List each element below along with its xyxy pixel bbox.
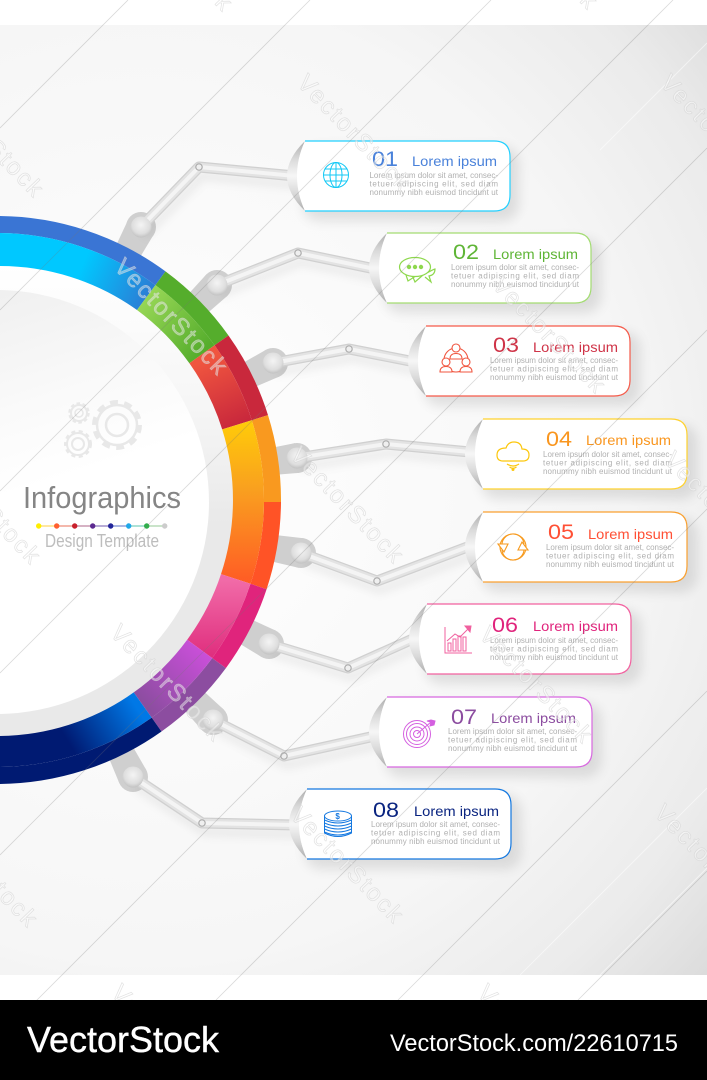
icon: coin stack (324, 811, 352, 836)
pivot spheres (122, 216, 312, 788)
watermark: VectorStock (105, 619, 229, 747)
card 08 (289, 789, 521, 869)
body 02: nonummy nibh euismod tincidunt ut (451, 280, 580, 289)
central disc (0, 290, 209, 714)
icon: bar chart (445, 626, 472, 653)
icon: team circle (440, 344, 472, 372)
body 06: tetuer adipiscing elit, sed diam (490, 644, 618, 654)
subtitle: Design Template (45, 531, 159, 551)
card 04 (465, 419, 697, 499)
body 07 (448, 727, 578, 753)
icon: target (404, 720, 435, 748)
body 08 (371, 820, 501, 846)
card 06 (409, 604, 641, 684)
body 07: Lorem ipsum dolor sit amet, consec- (448, 727, 577, 736)
segment 07 purple (134, 640, 226, 732)
body 07: tetuer adipiscing elit, sed diam (448, 736, 577, 744)
card 07 (369, 697, 601, 777)
body 05 (546, 543, 675, 569)
segments 04 and 05 orange (221, 415, 281, 589)
body 02: tetuer adipiscing elit, sed diam (451, 272, 579, 280)
body 08: nonummy nibh euismod tincidunt ut (371, 837, 501, 846)
watermark: VectorStock (109, 253, 233, 381)
segment 03 red (189, 336, 268, 429)
body 05: tetuer adipiscing elit, sed diam (546, 552, 674, 560)
body 07: nonummy nibh euismod tincidunt ut (448, 744, 578, 753)
icon: cycle arrows (498, 534, 528, 560)
number 06: 06 (492, 614, 518, 637)
segmented colour ring (0, 216, 281, 784)
watermark: VectorStock (474, 621, 598, 749)
body 04: tetuer adipiscing elit, sed diam (543, 458, 672, 468)
number 08: 08 (373, 799, 399, 822)
connector arms (133, 167, 473, 834)
watermark: VectorStock (285, 441, 409, 569)
body 05: Lorem ipsum dolor sit amet, consec- (546, 543, 674, 552)
icon: cloud (497, 442, 529, 470)
icon: coin stack: $ (335, 812, 340, 821)
watermark: VectorStock (285, 801, 409, 929)
heading 04: Lorem ipsum (586, 433, 671, 448)
heading 01: Lorem ipsum (412, 154, 497, 169)
body 01: tetuer adipiscing elit, sed diam (370, 180, 498, 188)
heading 08: Lorem ipsum (414, 804, 499, 819)
number 01: 01 (372, 148, 398, 171)
icon: globe (324, 162, 348, 188)
body 03: nonummy nibh euismod tincidunt ut (490, 373, 619, 382)
number 03: 03 (493, 334, 519, 357)
body 04: nonummy nibh euismod tincidunt ut (543, 467, 673, 476)
segment 06 pink (187, 574, 267, 668)
body 06 (490, 636, 619, 662)
elbow joints (196, 164, 389, 826)
body 06: nonummy nibh euismod tincidunt ut (490, 653, 619, 662)
body 08: Lorem ipsum dolor sit amet, consec- (371, 820, 500, 829)
watermark: VectorStock (487, 271, 611, 399)
icon: speech bubbles (400, 258, 435, 282)
card 02 (369, 233, 601, 313)
body 01: nonummy nibh euismod tincidunt ut (370, 188, 499, 197)
segment 01 blue (0, 216, 166, 310)
footer url: VectorStock.com/22610715 (390, 1030, 678, 1057)
segment 08 navy (0, 692, 162, 784)
footer bar (0, 1000, 707, 1080)
body 04: Lorem ipsum dolor sit amet, consec- (543, 450, 672, 459)
body 03: tetuer adipiscing elit, sed diam (490, 364, 618, 374)
footer logo: VectorStock (27, 1019, 220, 1060)
central grey ring (0, 262, 235, 738)
card 05 (465, 512, 697, 592)
heading 06: Lorem ipsum (533, 619, 618, 634)
number 07: 07 (451, 706, 477, 729)
segment 02 green (137, 271, 228, 363)
title: Infographics (23, 480, 181, 515)
heading 03: Lorem ipsum (533, 340, 618, 355)
heading 02: Lorem ipsum (493, 247, 578, 262)
body 03: Lorem ipsum dolor sit amet, consec- (490, 356, 618, 365)
body 05: nonummy nibh euismod tincidunt ut (546, 560, 675, 569)
card 03 (408, 326, 640, 406)
body 06: Lorem ipsum dolor sit amet, consec- (490, 636, 618, 645)
body 01: Lorem ipsum dolor sit amet, consec- (370, 171, 498, 180)
body 02: Lorem ipsum dolor sit amet, consec- (451, 263, 579, 272)
body 01 (370, 171, 499, 197)
number 05: 05 (548, 521, 574, 544)
heading 05: Lorem ipsum (588, 527, 673, 542)
body 03 (490, 356, 619, 382)
number 04: 04 (546, 428, 572, 451)
connector base plates (106, 212, 316, 792)
watermark: VectorStock (292, 69, 416, 197)
timeline dots (36, 523, 167, 529)
icon: gears (66, 402, 140, 456)
body 04 (543, 450, 673, 476)
card 01 (287, 141, 519, 221)
body 02 (451, 263, 580, 289)
body 08: tetuer adipiscing elit, sed diam (371, 828, 500, 838)
heading 07: Lorem ipsum (491, 711, 576, 726)
number 02: 02 (453, 241, 479, 264)
